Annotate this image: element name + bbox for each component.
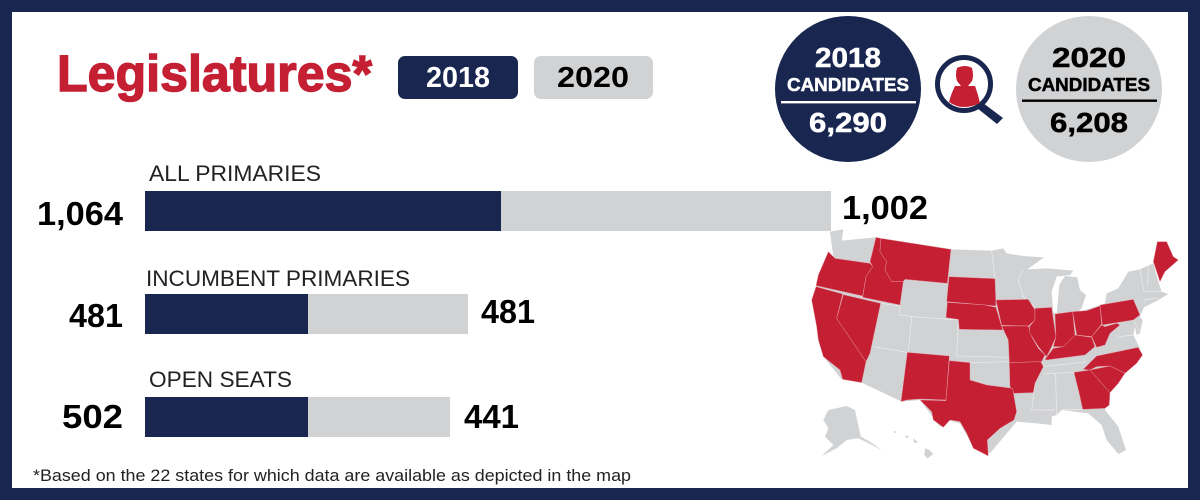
circle: 2018 candidates: 6,290 [809,107,887,138]
icon: magnifier with person [938,58,1003,124]
bar group: all primaries: 1,064 [37,195,124,232]
bar group: incumbent primaries: INCUMBENT PRIMARIES [146,266,410,291]
bar group: open seats: 502 [62,398,123,435]
map of US states [812,229,1178,459]
map: gray state borders [873,251,1162,417]
legend: 2018 [398,56,518,99]
map: alaska and hawaii [822,406,933,459]
bar group: open seats [62,367,519,437]
circle: 2020 candidates [1016,16,1162,162]
bar group: incumbent primaries: 481 [69,297,123,334]
bar group: incumbent primaries [69,266,535,334]
map: gray states [812,229,1168,454]
legend: 2018: 2018 [426,62,490,94]
bar group: all primaries: 1,002 [842,189,928,226]
legend: 2020: 2020 [557,62,629,94]
circle: 2020 candidates: 2020 [1052,42,1126,73]
bar group: all primaries [37,161,928,232]
bar group: open seats: OPEN SEATS [149,367,292,392]
circle: 2018 candidates: 2018 [815,42,881,73]
title: Legislatures* [57,45,372,102]
bar group: incumbent primaries: 481 [481,293,535,330]
circle: 2018 candidates [775,16,921,162]
circle: 2018 candidates: CANDIDATES [787,75,909,95]
circle: 2020 candidates: CANDIDATES [1028,75,1150,95]
footnote: *Based on the 22 states for which data are available as depicted in the map [33,467,631,485]
bar group: all primaries: ALL PRIMARIES [149,161,321,186]
map: red states [812,237,1178,456]
bar group: open seats: 441 [464,398,519,435]
legend: 2020 [534,56,653,99]
circle: 2020 candidates: 6,208 [1050,107,1128,138]
